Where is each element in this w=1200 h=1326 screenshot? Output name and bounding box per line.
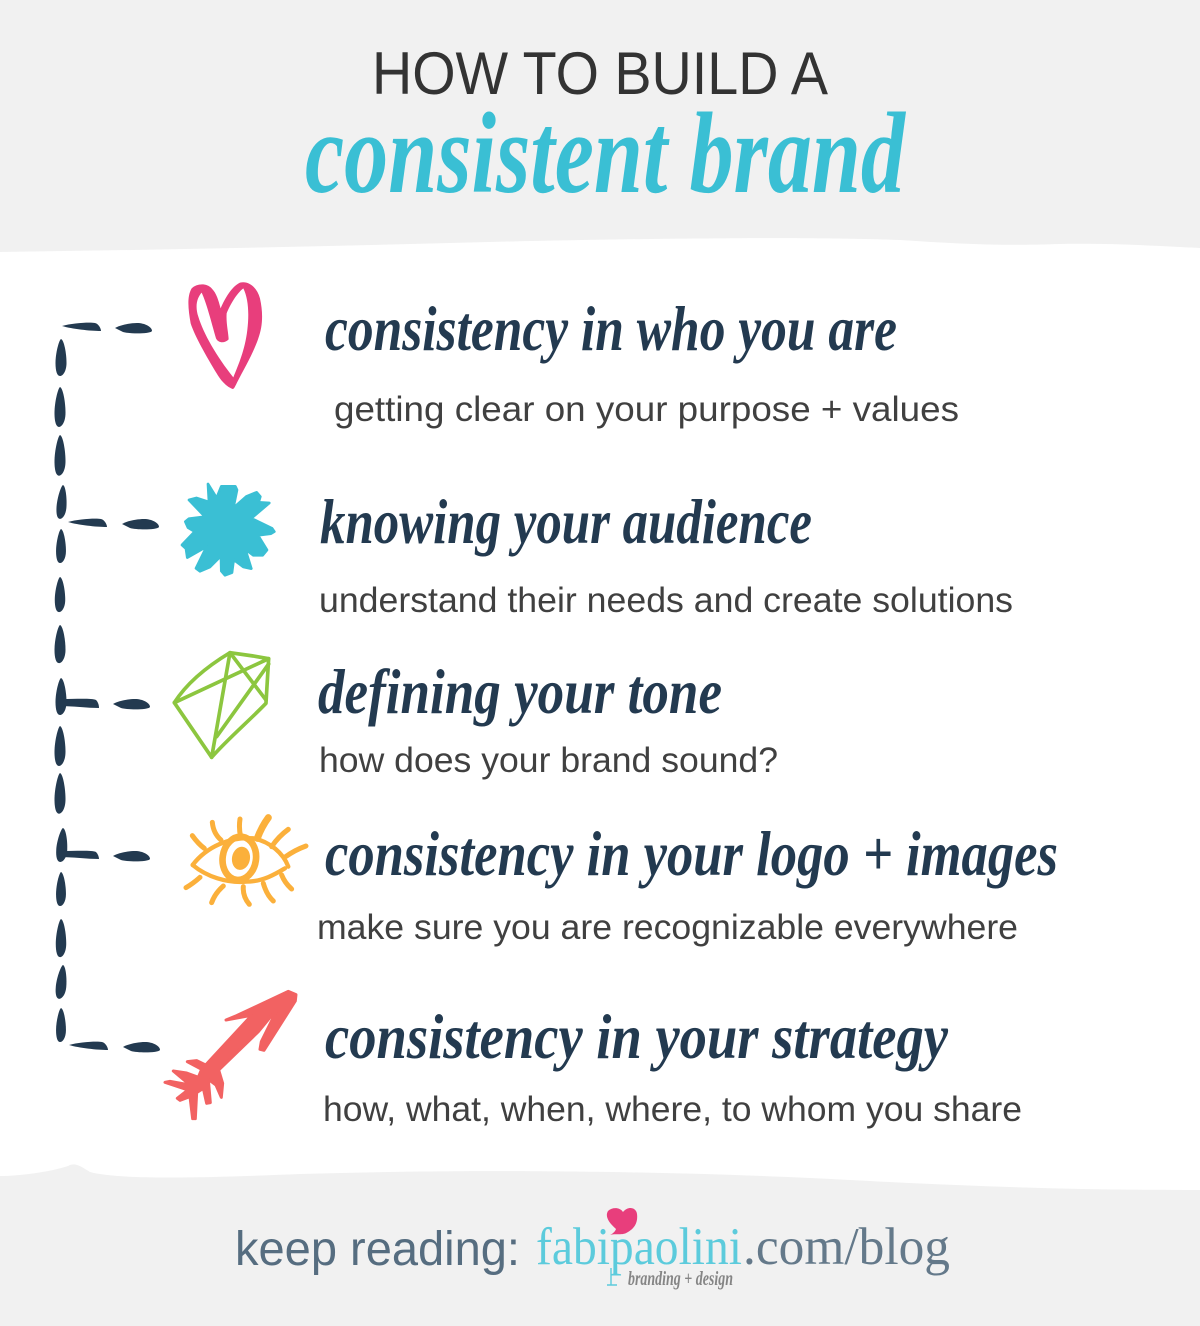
item 1 text: consistency in who you are <box>325 294 897 364</box>
footer call to action <box>235 1218 950 1290</box>
item 4 text: make sure you are recognizable everywhere <box>317 908 1018 947</box>
footer call to action: branding + design <box>628 1268 733 1290</box>
item 3 text: defining your tone <box>318 657 722 727</box>
item 3 text <box>318 657 778 780</box>
title: HOW TO BUILD A <box>372 40 828 107</box>
item 2 text <box>319 487 1013 620</box>
title: consistent brand <box>305 90 907 218</box>
item 5 text <box>323 1002 1022 1129</box>
footer call to action: .com/blog <box>743 1218 950 1276</box>
icon: pink heart <box>188 282 262 389</box>
item 2 text: understand their needs and create solutions <box>319 581 1013 620</box>
item 4 text <box>317 819 1058 947</box>
white content panel <box>0 238 1200 1190</box>
item 1 text <box>325 294 959 429</box>
item 2 text: knowing your audience <box>320 487 812 557</box>
item 1 text: getting clear on your purpose + values <box>334 390 959 429</box>
title <box>305 40 907 218</box>
icon: orange eye <box>186 818 306 904</box>
icon: green gem <box>174 653 269 757</box>
item 5 text: how, what, when, where, to whom you share <box>323 1090 1022 1129</box>
icon: logo heart <box>607 1208 637 1235</box>
dashed connector line <box>54 323 160 1052</box>
footer call to action: fabipaolini <box>536 1218 742 1276</box>
icon: blue splash <box>182 484 274 575</box>
item 4 text: consistency in your logo + images <box>325 819 1058 889</box>
icon: coral arrow <box>165 991 296 1119</box>
footer call to action: keep reading: <box>235 1223 520 1276</box>
item 3 text: how does your brand sound? <box>319 741 778 780</box>
item 5 text: consistency in your strategy <box>325 1002 949 1072</box>
